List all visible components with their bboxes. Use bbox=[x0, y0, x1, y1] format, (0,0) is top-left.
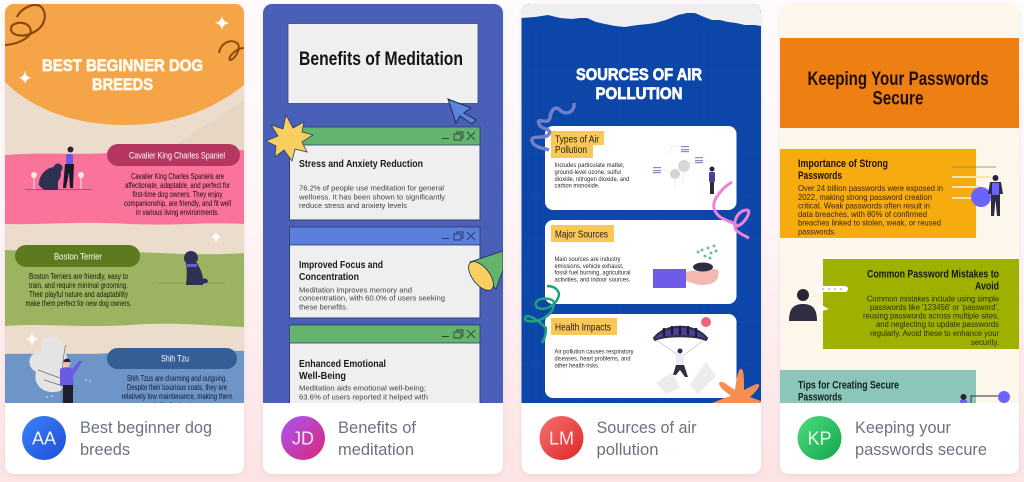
card: health impacts: other health risks. bbox=[554, 364, 600, 370]
icon: orange splat bbox=[712, 369, 761, 403]
card: health impacts: Health Impacts bbox=[555, 322, 611, 334]
window: improved focus and concentration: Concentration bbox=[299, 271, 359, 283]
footer: author JD: JD bbox=[292, 428, 314, 448]
section: tips for creating secure passwords: Passwords bbox=[798, 392, 842, 404]
section: shih tzu: Shih Tzus are charming and outgoing. bbox=[127, 374, 227, 383]
window: improved focus and concentration: Improved Focus and bbox=[299, 259, 383, 271]
illustration: person with speech bubble bbox=[789, 286, 848, 321]
window: improved focus and concentration: these benefits. bbox=[299, 302, 348, 312]
footer: author LM: pollution bbox=[596, 441, 658, 459]
illustration: person with checklist bbox=[952, 167, 1003, 216]
footer: author KP: passwords secure bbox=[855, 441, 987, 459]
footer: author JD: meditation bbox=[338, 441, 414, 459]
footer: author AA: Best beginner dog bbox=[80, 419, 212, 437]
footer: author LM bbox=[540, 416, 697, 460]
window: enhanced emotional well-being: Meditation aids emotional well-being; bbox=[299, 384, 426, 392]
panel: benefits of meditation card bbox=[263, 4, 503, 474]
panel: keeping your passwords secure card bbox=[780, 4, 1019, 474]
section: cavalier king charles spaniel: in various living environments. bbox=[136, 208, 219, 217]
card: major sources bbox=[545, 220, 736, 304]
window: improved focus and concentration: concentration, with 60.0% of users seeking bbox=[299, 294, 445, 302]
section: boston terrier: Boston Terrier bbox=[54, 252, 102, 262]
card: major sources: Main sources are industry bbox=[554, 257, 620, 263]
icon: cone bbox=[468, 250, 503, 291]
section: cavalier king charles spaniel: Cavalier King Charles Spaniels are bbox=[131, 172, 224, 181]
card: health impacts: diseases, heart problems, and bbox=[554, 357, 630, 363]
section: shih tzu bbox=[5, 337, 244, 410]
window: enhanced emotional well-being bbox=[289, 324, 480, 403]
illustration: hand with plant bbox=[653, 244, 718, 288]
icon: cursor arrow bbox=[448, 99, 476, 124]
section: boston terrier: Boston Terriers are friendly, easy to bbox=[29, 272, 129, 281]
section: importance of strong passwords: critical. Weak passwords often result in bbox=[798, 201, 930, 210]
window: enhanced emotional well-being: 63.6% of users reported it helped with bbox=[299, 392, 428, 402]
section: importance of strong passwords bbox=[780, 149, 1003, 238]
window: stress and anxiety reduction bbox=[290, 127, 480, 220]
section: tips for creating secure passwords bbox=[780, 370, 1010, 403]
card: types of air pollution: Pollution bbox=[555, 145, 587, 156]
section: importance of strong passwords: Importance of Strong bbox=[798, 158, 888, 170]
title bbox=[576, 68, 702, 100]
icon: green squiggle bbox=[525, 286, 559, 343]
section: importance of strong passwords: 2022, making strong password creation bbox=[798, 193, 932, 202]
section: importance of strong passwords: data breaches, with 80% of confirmed bbox=[798, 210, 927, 219]
section: importance of strong passwords: Over 24 billion passwords were exposed in bbox=[798, 184, 943, 193]
illustration: person with lock bbox=[960, 391, 1010, 404]
section: boston terrier bbox=[5, 245, 244, 327]
section: cavalier king charles spaniel bbox=[5, 144, 244, 225]
icon: yellow starburst bbox=[266, 115, 313, 161]
card: major sources: fossil fuel burning, agricultural bbox=[554, 271, 630, 277]
title band bbox=[780, 38, 1019, 128]
torn paper edge bbox=[521, 4, 761, 27]
panel: best beginner dog breeds card bbox=[5, 4, 244, 474]
title box: Benefits of Meditation bbox=[299, 49, 463, 70]
section: cavalier king charles spaniel: Cavalier King Charles Spaniel bbox=[129, 150, 225, 162]
section: tips for creating secure passwords: Tips for Creating Secure bbox=[798, 380, 899, 392]
footer: author JD: Benefits of bbox=[338, 419, 416, 437]
section: shih tzu: Despite their luxurious coats, they are bbox=[127, 383, 227, 392]
card: types of air pollution: ground-level ozone, sulfur bbox=[554, 170, 622, 176]
illustration: particles and person bbox=[653, 146, 715, 194]
section: importance of strong passwords: breaches linked to stolen, weak, or reused bbox=[798, 218, 941, 227]
card: major sources: emissions, vehicle exhaust, bbox=[554, 264, 624, 270]
window: improved focus and concentration: Meditation improves memory and bbox=[299, 286, 412, 294]
illustration: sitting dog bbox=[158, 251, 225, 285]
section: common password mistakes to avoid: reusing passwords across multiple sites, bbox=[863, 312, 999, 320]
card: major sources: Major Sources bbox=[555, 230, 608, 240]
card: major sources: activities, and indoor sources. bbox=[554, 278, 631, 284]
section: common password mistakes to avoid: passwords like '123456' or 'password', bbox=[870, 303, 999, 312]
section: boston terrier: make them perfect for new dog owners. bbox=[26, 299, 132, 308]
title: POLLUTION bbox=[596, 85, 682, 103]
icon: pink curl bbox=[714, 182, 749, 238]
icon: purple squiggle bbox=[532, 103, 574, 150]
card: health impacts: Air pollution causes respiratory bbox=[554, 350, 634, 356]
title box bbox=[288, 24, 478, 104]
card: types of air pollution: carbon monoxide. bbox=[554, 184, 600, 190]
icon: brown squiggle top right bbox=[219, 41, 244, 60]
section: common password mistakes to avoid: and neglecting to update passwords bbox=[876, 320, 999, 329]
icon: brown squiggle top left bbox=[5, 5, 45, 45]
footer: author KP: Keeping your bbox=[855, 419, 951, 437]
section: shih tzu: Shih Tzu bbox=[161, 354, 189, 364]
window: improved focus and concentration bbox=[290, 227, 480, 318]
card: types of air pollution: Types of Air bbox=[555, 134, 600, 146]
section: importance of strong passwords: passwords. bbox=[798, 227, 836, 236]
illustration: person with dog bbox=[25, 146, 92, 193]
section: shih tzu: relatively low maintenance, making them bbox=[122, 392, 232, 401]
footer: author LM: Sources of air bbox=[596, 419, 697, 437]
icon: sparkles bbox=[19, 16, 229, 346]
footer: author JD bbox=[281, 416, 416, 460]
card: health impacts bbox=[545, 314, 736, 398]
section: common password mistakes to avoid bbox=[789, 259, 1019, 349]
section: common password mistakes to avoid: regularly. Avoid these to enhance your bbox=[870, 329, 999, 338]
section: importance of strong passwords: Passwords bbox=[798, 170, 842, 182]
title band: Secure bbox=[872, 88, 924, 110]
window: enhanced emotional well-being: Enhanced Emotional bbox=[299, 358, 386, 370]
section: common password mistakes to avoid: security. bbox=[971, 338, 999, 347]
section: boston terrier: Their playful nature and adaptability bbox=[29, 290, 128, 299]
footer: author KP bbox=[798, 416, 987, 460]
title: BREEDS bbox=[92, 76, 153, 94]
footer: author AA: AA bbox=[32, 428, 56, 448]
section: common password mistakes to avoid: Common mistakes include using simple bbox=[867, 294, 1000, 304]
illustration: person with tree bbox=[29, 337, 91, 403]
orange header shape bbox=[5, 4, 244, 125]
card: types of air pollution bbox=[545, 126, 736, 210]
window: stress and anxiety reduction: reduce stress and anxiety levels bbox=[299, 201, 407, 210]
card: types of air pollution: dioxide, nitrogen dioxide, and bbox=[554, 177, 630, 183]
illustration: parachute bbox=[654, 317, 716, 394]
window: enhanced emotional well-being: Well-Being bbox=[299, 370, 346, 382]
title bbox=[42, 59, 202, 90]
footer: author AA bbox=[22, 416, 212, 460]
footer: author KP: KP bbox=[807, 428, 832, 448]
card: types of air pollution: Includes particulate matter, bbox=[554, 163, 625, 169]
title: SOURCES OF AIR bbox=[576, 66, 702, 84]
section: shih tzu: suitable for beginners. bbox=[147, 401, 207, 410]
window: stress and anxiety reduction: wellness. It has been shown to significantly bbox=[298, 192, 445, 202]
footer: author AA: breeds bbox=[80, 441, 130, 459]
window: stress and anxiety reduction: Stress and Anxiety Reduction bbox=[299, 158, 423, 170]
section: cavalier king charles spaniel: first-time dog owners. They enjoy bbox=[132, 190, 223, 199]
section: cavalier king charles spaniel: companionship, are friendly, and fit well bbox=[124, 199, 231, 208]
footer: author LM: LM bbox=[549, 428, 574, 448]
section: cavalier king charles spaniel: affectionate, adaptable, and perfect for bbox=[125, 181, 230, 190]
window: stress and anxiety reduction: 76.2% of people use meditation for general bbox=[299, 184, 444, 192]
panel: sources of air pollution card bbox=[521, 4, 761, 474]
section: boston terrier: train, and require minimal grooming. bbox=[29, 281, 128, 290]
section: common password mistakes to avoid: Avoid bbox=[975, 280, 999, 292]
title: BEST BEGINNER DOG bbox=[42, 57, 203, 75]
